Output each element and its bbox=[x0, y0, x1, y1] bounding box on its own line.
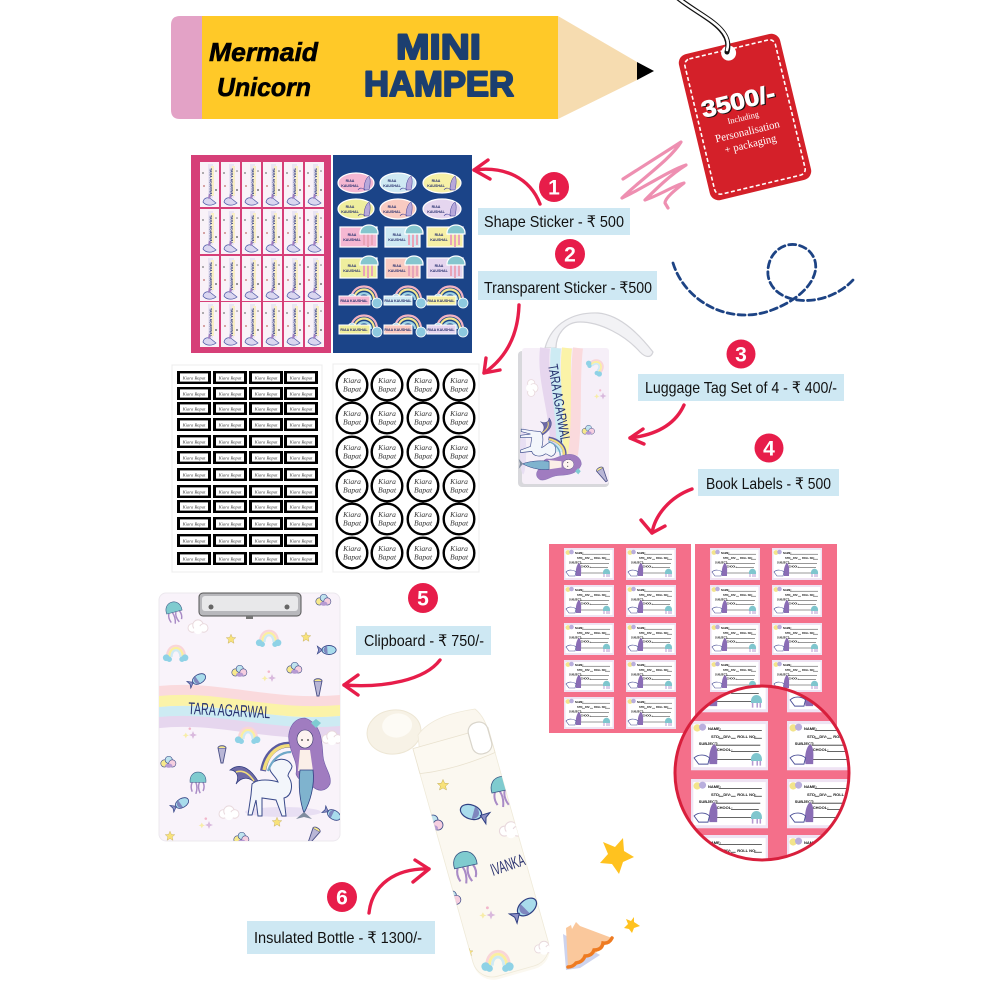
number badge 1 bbox=[539, 172, 569, 202]
price tag bbox=[677, 0, 813, 202]
number badge 4: 4 bbox=[763, 438, 775, 460]
navy shape sticker sheet bbox=[333, 155, 472, 353]
navy shape sticker sheet: KAUSHAL bbox=[430, 238, 449, 242]
number badge 3: 3 bbox=[735, 344, 747, 366]
navy shape sticker sheet: RIAA KAUSHAL bbox=[384, 328, 412, 332]
navy shape sticker sheet: RIAA bbox=[435, 233, 444, 237]
subtitle bbox=[209, 37, 319, 102]
number badge 6: 6 bbox=[336, 886, 348, 910]
navy shape sticker sheet: KAUSHAL bbox=[343, 238, 362, 242]
book labels sheet left bbox=[549, 544, 691, 733]
number badge 6 bbox=[327, 882, 357, 912]
tag stitching bbox=[684, 39, 806, 195]
tag detail text: + packaging bbox=[723, 132, 778, 156]
tag strap bbox=[545, 313, 653, 356]
tag body bbox=[522, 348, 609, 484]
pencil yellow body bbox=[202, 16, 558, 119]
label: insulated bottle bbox=[247, 921, 435, 954]
dashed loop decoration bbox=[673, 244, 853, 315]
navy shape sticker sheet: RIAA bbox=[348, 264, 357, 268]
number badge 1: 1 bbox=[548, 176, 560, 200]
clipboard pattern icons bbox=[161, 594, 342, 845]
bottle button bbox=[466, 720, 494, 756]
navy shape sticker sheet: RIAA bbox=[348, 233, 357, 237]
book labels sheet right bbox=[695, 544, 837, 733]
tag detail text: Including bbox=[726, 109, 760, 126]
jellyfish rectangle stickers bbox=[340, 227, 463, 278]
arrow 1 bbox=[474, 160, 540, 204]
navy shape sticker sheet: RIAA KAUSHAL bbox=[427, 328, 455, 332]
number badge 2: 2 bbox=[564, 244, 576, 266]
navy shape sticker sheet: RIAA bbox=[393, 233, 402, 237]
bottle neck bbox=[418, 709, 490, 755]
subtitle: Unicorn bbox=[217, 72, 311, 102]
title: HAMPER bbox=[364, 65, 514, 104]
tag body bbox=[677, 32, 813, 202]
arrow 3 bbox=[630, 405, 684, 444]
transparent sticker sheet: circles bbox=[333, 364, 479, 572]
clipboard rainbow band bbox=[155, 690, 345, 733]
oval stickers bbox=[338, 173, 461, 219]
arrow 6 bbox=[369, 860, 429, 913]
label: transparent sticker bbox=[478, 271, 657, 300]
label: shape sticker bbox=[478, 208, 630, 235]
navy shape sticker sheet: KAUSHAL bbox=[388, 238, 407, 242]
label: clipboard bbox=[356, 626, 491, 655]
arrow 5 bbox=[344, 660, 440, 695]
pencil title banner bbox=[171, 16, 654, 119]
bottle body bbox=[413, 729, 554, 984]
label: luggage tag: Luggage Tag Set of 4 - ₹ 400/- bbox=[645, 380, 837, 397]
insulated bottle bbox=[364, 706, 554, 984]
subtitle: Mermaid bbox=[209, 37, 319, 67]
arrow 4 bbox=[641, 489, 692, 533]
title: MINI bbox=[396, 28, 481, 67]
pencil wood tip bbox=[558, 16, 637, 119]
mermaid and unicorn bbox=[230, 718, 330, 819]
bottle pattern icons bbox=[432, 776, 550, 972]
pink scribble bbox=[622, 142, 686, 208]
tag art bbox=[519, 418, 581, 480]
navy shape sticker sheet: RIAA KAUSHAL bbox=[340, 328, 368, 332]
number badge 5: 5 bbox=[417, 588, 429, 610]
tag detail text: Personalisation bbox=[714, 118, 781, 145]
navy shape sticker sheet: KAUSHAL bbox=[343, 269, 362, 273]
transparent sticker sheet: rectangles bbox=[172, 365, 322, 572]
metal clip bbox=[199, 593, 301, 619]
label: insulated bottle: Insulated Bottle - ₹ 1300/- bbox=[254, 930, 422, 947]
tag hole bbox=[720, 44, 738, 62]
big yellow star bbox=[600, 838, 634, 874]
label: transparent sticker: Transparent Sticker - ₹500 bbox=[484, 280, 652, 297]
label: shape sticker: Shape Sticker - ₹ 500 bbox=[484, 214, 624, 231]
navy shape sticker sheet: KAUSHAL bbox=[388, 269, 407, 273]
bottle collar bbox=[413, 728, 496, 777]
pencil shaving bbox=[563, 922, 612, 970]
label: clipboard: Clipboard - ₹ 750/- bbox=[364, 633, 484, 650]
pencil lead bbox=[637, 62, 654, 80]
navy shape sticker sheet: RIAA KAUSHAL bbox=[340, 299, 368, 303]
arrow 2 bbox=[484, 305, 519, 373]
bottle name: IVANKA bbox=[488, 850, 528, 880]
magnified book labels circle bbox=[674, 684, 850, 862]
navy shape sticker sheet: RIAA KAUSHAL bbox=[427, 299, 455, 303]
clipboard bbox=[155, 593, 345, 845]
pencil eraser bbox=[171, 16, 202, 119]
clipboard name: TARA AGARWAL bbox=[188, 699, 271, 722]
navy shape sticker sheet: RIAA bbox=[435, 264, 444, 268]
number badge 3 bbox=[726, 340, 756, 368]
navy shape sticker sheet: RIAA bbox=[393, 264, 402, 268]
tag price: 3500/- bbox=[700, 81, 779, 123]
number badge 5 bbox=[408, 583, 438, 613]
pink shape sticker sheet bbox=[191, 155, 331, 353]
tag string bbox=[678, 0, 728, 52]
label: luggage tag bbox=[638, 374, 844, 401]
small yellow star bbox=[624, 917, 640, 933]
number badge 2 bbox=[555, 239, 585, 269]
label: book labels: Book Labels - ₹ 500 bbox=[706, 476, 831, 493]
title bbox=[364, 28, 514, 104]
tag shadow bbox=[518, 351, 609, 487]
luggage tag bbox=[518, 313, 653, 487]
rainbow stickers bbox=[348, 286, 382, 308]
clipboard board bbox=[159, 593, 340, 841]
tag price: 3500/- bbox=[699, 80, 778, 123]
tag name: TARA AGARWAL bbox=[545, 363, 574, 444]
tag rainbow bbox=[544, 348, 578, 455]
navy shape sticker sheet: RIAA KAUSHAL bbox=[384, 299, 412, 303]
bottle lid bbox=[364, 706, 424, 758]
label: book labels bbox=[698, 469, 839, 496]
tag detail text bbox=[711, 105, 785, 158]
navy shape sticker sheet: KAUSHAL bbox=[430, 269, 449, 273]
number badge 4 bbox=[754, 434, 784, 462]
